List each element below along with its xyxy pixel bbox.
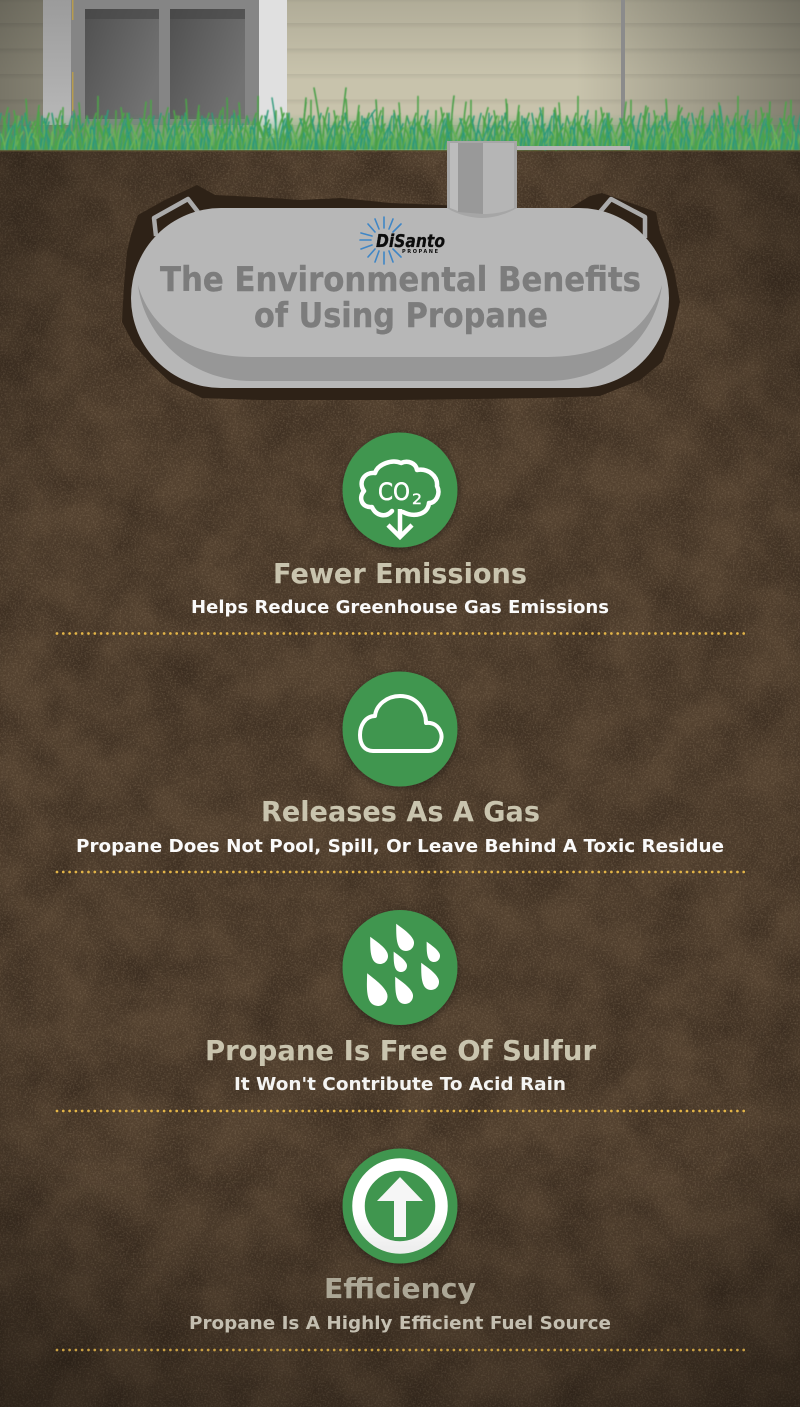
tank dome cover xyxy=(447,141,517,218)
icon: CO2 cloud with down arrow: 2 xyxy=(412,492,422,508)
tank handle right xyxy=(600,199,645,238)
dotted divider 3 xyxy=(57,1110,744,1112)
heading: Efficiency xyxy=(324,1272,476,1305)
heading: Propane Is Free Of Sulfur xyxy=(205,1034,596,1067)
title: of Using Propane xyxy=(254,296,548,336)
horizontal gas line xyxy=(510,146,630,150)
grass strip xyxy=(0,66,800,150)
subheading: It Won't Contribute To Acid Rain xyxy=(234,1074,566,1095)
icon: cloud xyxy=(342,672,458,786)
dotted divider 2 xyxy=(57,871,744,873)
underground dark pit around tank xyxy=(122,185,680,400)
logo sunburst xyxy=(360,217,401,264)
propane tank body xyxy=(131,208,669,388)
tank handle left xyxy=(154,199,198,236)
house wall background xyxy=(0,0,800,152)
icon: CO2 cloud with down arrow: CO xyxy=(378,478,410,506)
icon: CO2 cloud with down arrow xyxy=(342,432,458,548)
subheading: Propane Does Not Pool, Spill, Or Leave Behind A Toxic Residue xyxy=(76,836,724,857)
panel: efficiency xyxy=(189,1148,611,1334)
icon: rain drops xyxy=(342,910,458,1025)
subheading: Propane Is A Highly Efficient Fuel Source xyxy=(189,1313,611,1334)
panel: releases as a gas xyxy=(76,672,724,857)
panel: free of sulfur xyxy=(205,910,596,1095)
icon: up arrow in ring xyxy=(342,1148,458,1264)
logo: DiSanto Propane xyxy=(360,217,445,264)
heading: Fewer Emissions xyxy=(273,557,527,590)
door with frame and glass panes xyxy=(43,0,287,138)
dotted divider 1 xyxy=(57,632,744,635)
logo subtitle: PROPANE xyxy=(402,249,439,255)
panel: fewer emissions xyxy=(191,432,609,618)
title: The Environmental Benefits xyxy=(160,260,641,300)
dotted divider 4 xyxy=(57,1349,744,1351)
title xyxy=(160,260,641,336)
vertical wall pipe xyxy=(621,0,625,140)
logo wordmark: DiSanto xyxy=(376,231,445,252)
subheading: Helps Reduce Greenhouse Gas Emissions xyxy=(191,597,609,618)
heading: Releases As A Gas xyxy=(261,795,540,828)
